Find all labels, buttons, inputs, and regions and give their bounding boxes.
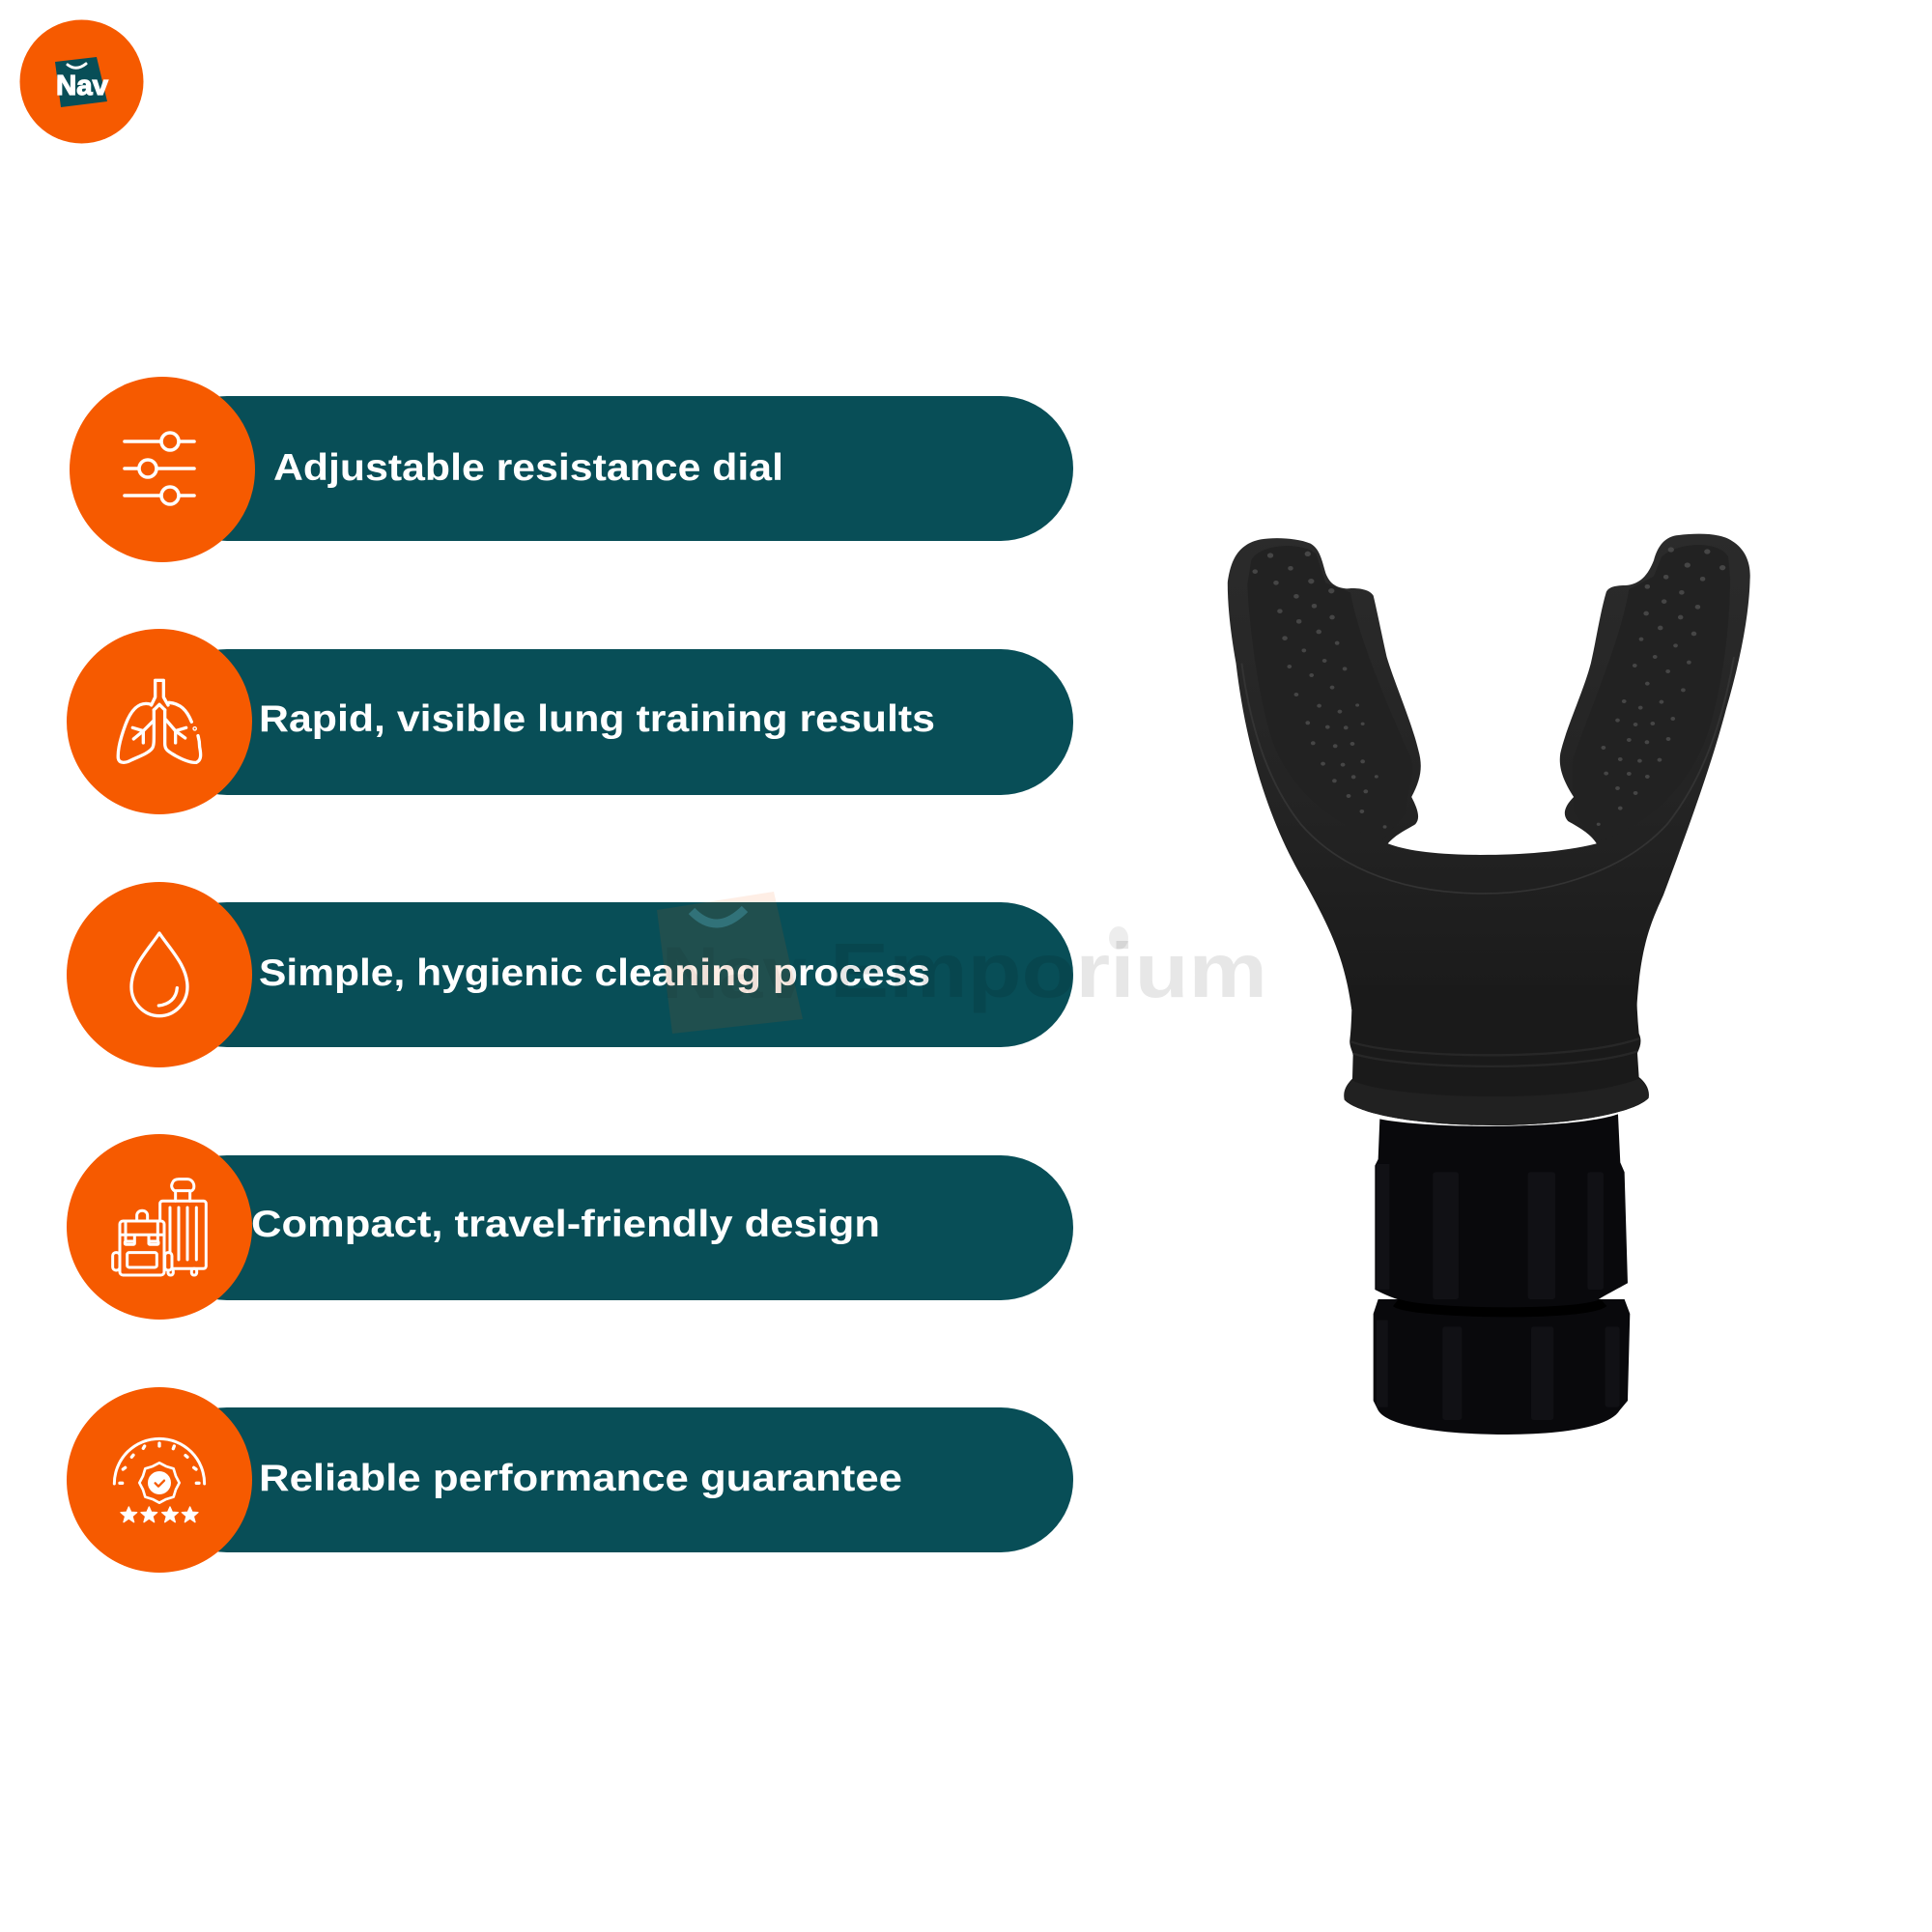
mouthpiece upper prongs [1228, 534, 1750, 1009]
icon: gauge badge and stars [114, 1438, 205, 1522]
feature row: cleaning [67, 882, 1073, 1067]
icon: lungs [118, 680, 201, 762]
label: cleaning: Simple, hygienic cleaning process [259, 952, 930, 994]
watermark: Nav Emporium: Emporium [830, 927, 1267, 1013]
feature row: reliable performance [67, 1387, 1073, 1573]
icon: luggage and backpack [113, 1179, 206, 1275]
product photo: mouthpiece trainer [1228, 534, 1750, 1435]
label: adjustable resistance dial: Adjustable resistance dial [273, 447, 783, 489]
icon: sliders [125, 433, 194, 504]
label: travel-friendly: Compact, travel-friendly design [251, 1204, 880, 1245]
feature row: lung training [67, 629, 1073, 814]
watermark: Nav Emporium [657, 892, 1267, 1034]
label: reliable performance: Reliable performance guarantee [259, 1458, 902, 1499]
icon: water drop [131, 933, 187, 1016]
mouthpiece neck and flange [1344, 985, 1649, 1125]
adjustable dial [1374, 1114, 1630, 1435]
logo badge [19, 19, 143, 143]
label: lung training: Rapid, visible lung training results [259, 698, 935, 740]
feature row: adjustable resistance dial [70, 377, 1073, 562]
watermark: Nav Emporium: Nav [662, 932, 807, 1014]
logo badge: Nav [56, 71, 108, 101]
feature row: travel-friendly [67, 1134, 1073, 1320]
